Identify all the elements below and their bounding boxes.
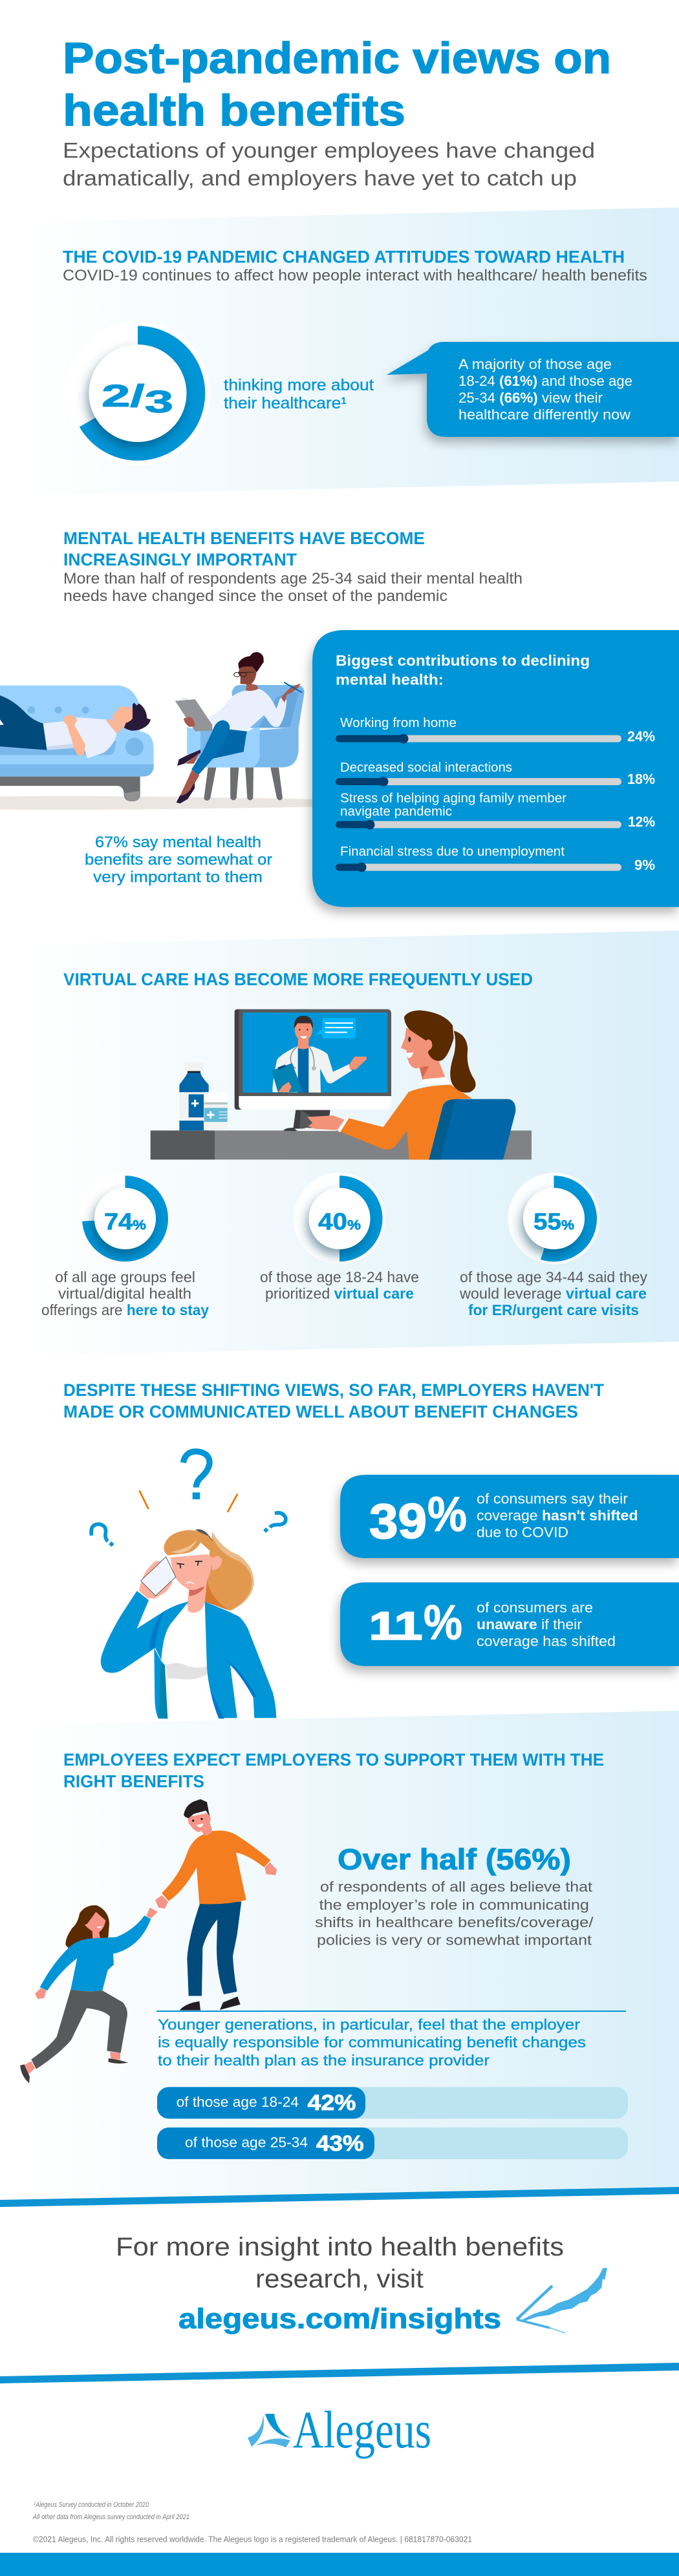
stat card: 39%: of consumers say their [477, 1490, 628, 1507]
subtitle: Expectations of younger employees have changed [63, 138, 595, 162]
footnotes [32, 2501, 472, 2544]
illustration: patient on couch with therapist [0, 652, 312, 810]
text: employer role important [315, 1879, 594, 1948]
text: younger generations: is equally responsible for communicating benefit changes [158, 2034, 586, 2051]
text: 40% prioritized virtual care: prioritized virtual care [265, 1285, 414, 1302]
stat: over half 56%: Over half (56%) [338, 1843, 571, 1875]
chart: 74% donut: 74% [104, 1209, 146, 1235]
text: 74% here to stay [41, 1269, 209, 1318]
text: employer role important: policies is very or somewhat important [317, 1932, 592, 1948]
bar: working from home 24%: 24% [627, 728, 655, 744]
text: 55% virtual care for ER visits: of those age 34-44 said they [460, 1269, 647, 1285]
heading: employer communication: MADE OR COMMUNICATED WELL ABOUT BENEFIT CHANGES [63, 1402, 578, 1422]
chart: 2/3 donut: 3 [145, 385, 173, 419]
stat card: 39%: 39 [369, 1494, 427, 1549]
text: 74% here to stay: offerings are here to stay [41, 1302, 209, 1318]
stat card: 11%: coverage has shifted [477, 1633, 616, 1649]
heading: employer support: EMPLOYEES EXPECT EMPLOYERS TO SUPPORT THEM WITH THE [63, 1750, 604, 1769]
panel: mental health [0, 529, 679, 907]
callout: 67% say mental health benefits important: benefits are somewhat or [85, 851, 272, 869]
label: thinking more about healthcare [224, 376, 374, 412]
subheading: mental health [63, 570, 523, 605]
text: employer role important: the employer’s role in communicating [319, 1897, 589, 1913]
stat card: 39%: coverage hasn't shifted [477, 1507, 638, 1524]
stat card: 39% [340, 1475, 679, 1558]
stat card: 11% [340, 1582, 679, 1666]
title [63, 34, 611, 135]
panel: biggest contributions [312, 630, 679, 907]
bar: financial stress due to unemployment 9%: Financial stress due to unemployment [340, 845, 565, 859]
bar: decreased social interactions 18%: Decreased social interactions [340, 761, 512, 775]
footnotes: 1 [34, 2502, 36, 2506]
stat card: 11%: of consumers are [477, 1599, 593, 1616]
bar: stress of helping aging family member 12%: Stress of helping aging family member [340, 791, 566, 805]
bar: age 18-24 42%: of those age 18-24 [177, 2094, 299, 2110]
bar: financial stress due to unemployment 9%: 9% [634, 857, 655, 873]
footnotes: ©2021 Alegeus, Inc. All rights reserved worldwide. The Alegeus logo is a registered trademark of Alegeus. | 681817870-063021 [33, 2535, 472, 2544]
bar: age 18-24 42% [157, 2087, 628, 2118]
heading: covid attitudes: THE COVID-19 PANDEMIC CHANGED ATTITUDES TOWARD HEALTH [63, 247, 625, 266]
bar: stress of helping aging family member 12%: 12% [628, 814, 655, 830]
heading: virtual care: VIRTUAL CARE HAS BECOME MORE FREQUENTLY USED [63, 969, 533, 989]
panel: covid attitudes [0, 207, 679, 496]
heading: mental health: INCREASINGLY IMPORTANT [63, 550, 297, 569]
panel: virtual care [0, 931, 679, 1356]
bar: age 25-34 43% [157, 2127, 628, 2159]
bar: age 25-34 43%: 43% [316, 2131, 364, 2156]
text: 55% virtual care for ER visits: would leverage virtual care [459, 1285, 647, 1302]
call to action: For more insight into health benefits [116, 2233, 564, 2261]
subheading: mental health: needs have changed since the onset of the pandemic [63, 587, 447, 605]
panel: employer communication [63, 1380, 679, 1718]
callout: majority by age: 18-24 (61%) and those age [458, 373, 632, 389]
title: Post-pandemic views on [63, 34, 611, 83]
text: 74% here to stay: of all age groups feel [55, 1269, 195, 1285]
stat card: 11%: unaware if their [477, 1616, 582, 1632]
call to action: alegeus.com/insights [178, 2303, 501, 2335]
heading: employer support: RIGHT BENEFITS [63, 1772, 204, 1791]
heading: mental health: MENTAL HEALTH BENEFITS HAVE BECOME [63, 529, 425, 548]
logo: Alegeus [248, 2400, 431, 2459]
label: thinking more about healthcare: their healthcare¹ [224, 394, 347, 412]
text: employer role important: shifts in healthcare benefits/coverage/ [315, 1914, 594, 1930]
text: 55% virtual care for ER visits [459, 1269, 647, 1318]
text: 40% prioritized virtual care [260, 1269, 419, 1302]
stat card: 39%: % [427, 1487, 467, 1542]
stat card: 11%: % [424, 1595, 462, 1651]
bar: financial stress due to unemployment 9% [336, 845, 655, 873]
callout: majority by age: 25-34 (66%) view their [458, 390, 603, 406]
illustration: man helping woman up [20, 1799, 277, 2083]
heading: employer communication [63, 1380, 604, 1422]
call to action [116, 2233, 564, 2335]
icon: hand-drawn arrow [517, 2268, 607, 2333]
footnotes: Alegeus Survey conducted in October 2020 [35, 2501, 149, 2509]
text: younger generations: to their health plan as the insurance provider [158, 2052, 490, 2069]
label: thinking more about healthcare: thinking more about [224, 376, 374, 394]
call to action: research, visit [255, 2265, 424, 2294]
bar: age 25-34 43%: of those age 25-34 [185, 2135, 308, 2151]
chart: 55% donut [508, 1173, 600, 1265]
bar: decreased social interactions 18% [336, 761, 655, 787]
stat card: 11%: 11 [369, 1604, 422, 1648]
text: younger generations: Younger generations, in particular, feel that the employer [158, 2016, 580, 2033]
panel heading [336, 652, 590, 688]
chart: 55% donut: 55% [534, 1209, 574, 1235]
heading: employer communication: DESPITE THESE SHIFTING VIEWS, SO FAR, EMPLOYERS HAVEN'T [63, 1380, 604, 1400]
text: 55% virtual care for ER visits: for ER/urgent care visits [468, 1302, 639, 1318]
subtitle [63, 138, 595, 190]
illustration: telehealth video call [151, 1009, 532, 1159]
bar: decreased social interactions 18%: 18% [627, 771, 655, 787]
logo: Alegeus: Alegeus [293, 2400, 431, 2459]
callout: majority by age: healthcare differently now [458, 406, 630, 423]
text: 74% here to stay: virtual/digital health [58, 1285, 191, 1302]
stat card: 39%: due to COVID [477, 1524, 568, 1541]
bar: stress of helping aging family member 12%: navigate pandemic [340, 805, 452, 819]
text: 40% prioritized virtual care: of those age 18-24 have [260, 1269, 419, 1285]
panel: employer support [0, 1711, 679, 2204]
title: health benefits [63, 86, 405, 135]
callout: majority by age [387, 342, 679, 437]
subheading: covid attitudes: COVID-19 continues to affect how people interact with healthcare/ health benefits [63, 267, 647, 284]
bar: age 18-24 42%: 42% [308, 2091, 356, 2115]
bar: working from home 24%: Working from home [340, 716, 457, 730]
callout: 67% say mental health benefits important: very important to them [93, 869, 263, 886]
text: employer role important: of respondents of all ages believe that [320, 1879, 592, 1895]
chart: 74% donut [79, 1173, 171, 1265]
footnotes: All other data from Alegeus survey conducted in April 2021 [32, 2513, 189, 2521]
illustration: confused woman on phone [91, 1452, 286, 1718]
callout: 67% say mental health benefits important: 67% say mental health [95, 834, 261, 851]
chart: 40% donut: 40% [318, 1209, 361, 1235]
callout: 67% say mental health benefits important [85, 834, 272, 886]
bar: working from home 24% [336, 716, 655, 744]
panel heading: Biggest contributions to declining [336, 652, 590, 669]
panel heading: mental health: [336, 671, 444, 688]
subtitle: dramatically, and employers have yet to catch up [63, 166, 577, 190]
chart: 2/3 donut [65, 321, 210, 465]
text: younger generations [158, 2016, 586, 2069]
chart: 40% donut [294, 1173, 385, 1265]
heading: employer support [63, 1750, 604, 1791]
bar: stress of helping aging family member 12% [336, 791, 655, 830]
heading: mental health [63, 529, 425, 569]
callout: majority by age: A majority of those age [458, 356, 612, 372]
chart: 2/3 donut: 2/ [102, 379, 127, 414]
subheading: mental health: More than half of respondents age 25-34 said their mental health [63, 570, 523, 587]
